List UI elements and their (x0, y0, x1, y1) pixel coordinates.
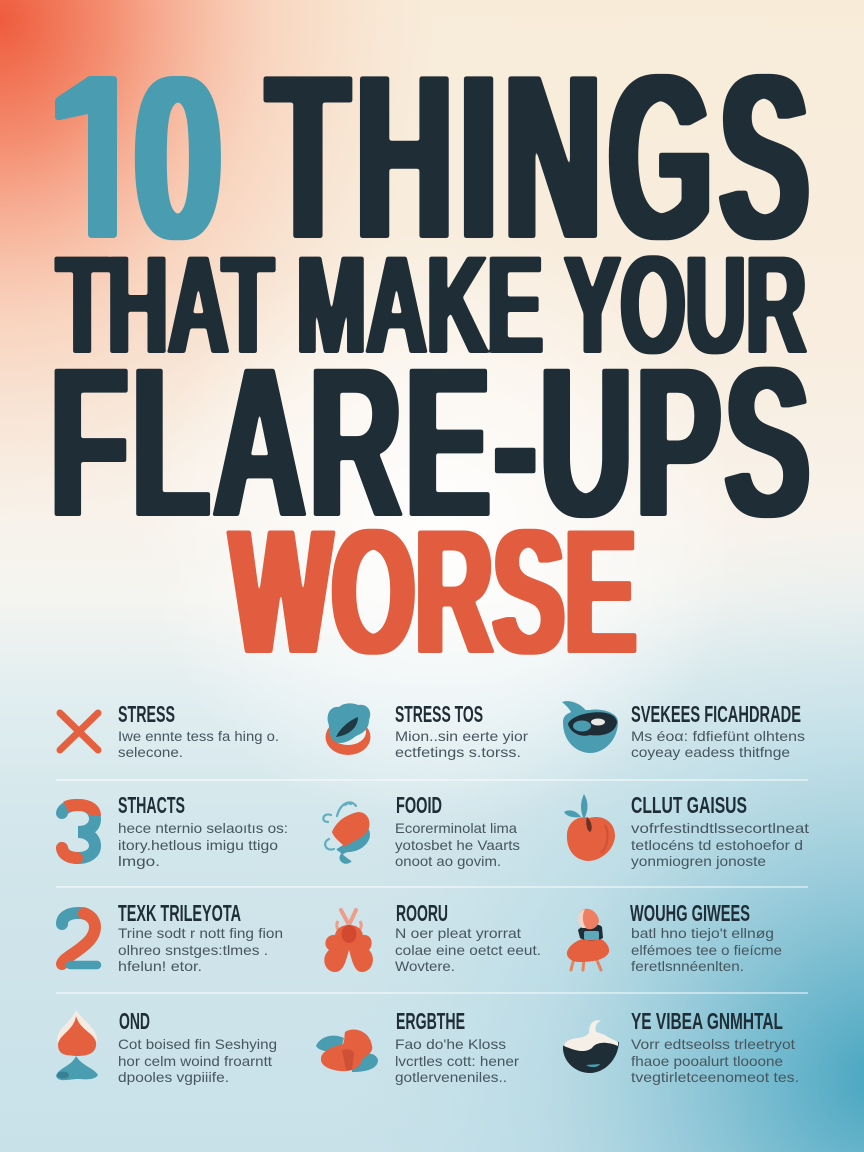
dividers (56, 780, 808, 993)
icon: coral lungs (324, 910, 373, 972)
body text: ectfetings s.torss. (395, 744, 521, 760)
body text (631, 820, 809, 869)
body text: gotlerveneniles.. (395, 1069, 507, 1085)
heading: ye vibea gnmhtal: YE VIBEA GNMHTAL (631, 1008, 783, 1034)
body text: Ms éoα: fdfiefünt olhtens (631, 728, 805, 744)
heading: stress tos: STRESS TOS (395, 701, 483, 727)
body text: feretlsnnéenlten. (631, 958, 744, 974)
title (54, 74, 810, 655)
body text (631, 1036, 799, 1085)
body text: lmgo. (118, 853, 160, 869)
title line: FLARE-UPS: FLARE-UPS (50, 323, 810, 562)
body text: colae eine oetct eeut. (395, 942, 541, 958)
body text (395, 925, 541, 974)
heading: wouhg giwees: WOUHG GIWEES (630, 900, 750, 926)
heading: ond: OND (119, 1008, 150, 1034)
item: text trileyota (62, 900, 283, 974)
body text: yotosbet he Vaarts (395, 837, 520, 853)
body text: Wovtere. (395, 958, 455, 974)
body text (631, 728, 805, 760)
body text (631, 925, 782, 974)
heading: text trileyota: TEXK TRILEYOTA (118, 900, 241, 926)
item: sthacts (62, 792, 288, 869)
body text: Cot boised fin Seshying (118, 1036, 277, 1052)
heading: rooru: ROORU (396, 900, 448, 926)
body text: N oer pleat yrorrat (395, 925, 521, 941)
body text: Mion..sin eerte yior (395, 728, 528, 744)
body text (395, 820, 520, 869)
body text: fhaoe pooalurt tlooone (631, 1053, 783, 1069)
icon: teal bowl (562, 701, 618, 753)
body text (395, 728, 528, 760)
icon: dark bowl with steam (563, 1021, 619, 1073)
icon: numeral 2 (62, 913, 97, 965)
body text (395, 1036, 519, 1085)
body text: hor celm woind froarntt (118, 1053, 272, 1069)
icon: flame drop (56, 1010, 98, 1080)
body text: Fao do'he Kloss (395, 1036, 506, 1052)
item: svekees ficahdrade (562, 701, 805, 760)
item: ergbthe (316, 1008, 519, 1085)
icon: numeral 3 (62, 805, 95, 858)
heading: fooid: FOOID (396, 792, 442, 818)
body text: dpooles vgpiiife. (118, 1069, 229, 1085)
title line: THAT MAKE YOUR: THAT MAKE YOUR (56, 227, 806, 383)
item: ond (56, 1008, 277, 1085)
body text: vofrfestindtlssecortlneat (631, 820, 809, 836)
icon: red X (60, 713, 98, 750)
heading: cllut gaisus: CLLUT GAISUS (631, 792, 747, 818)
item: wouhg giwees (567, 900, 782, 974)
body text: Vorr edtseolss trleetryot (631, 1036, 795, 1052)
body text: batl hno tiejo't ellnøg (631, 925, 774, 941)
icon: seated figure (567, 909, 609, 970)
body text: tvegtirletceenomeot tes. (631, 1069, 799, 1085)
heading: stress: STRESS (118, 701, 175, 727)
icon: apple (564, 794, 615, 861)
body text: onoot ao govim. (395, 853, 501, 869)
heading: sthacts: STHACTS (118, 792, 185, 818)
title line: WORSE: WORSE (230, 493, 636, 692)
item: stress tos (326, 701, 528, 760)
body text: Trine sodt r nott fing fion (118, 925, 283, 941)
title number: 10: 1 (53, 25, 143, 288)
body text: tetlocéns td estohoefor d (631, 837, 803, 853)
body text (118, 728, 279, 760)
body text: selecone. (118, 744, 183, 760)
body text: hece nternio selaoıtıs os: (118, 820, 288, 836)
body text: olhreo snstges:tlmes . (118, 942, 268, 958)
body text (118, 820, 288, 869)
title number: 10 (55, 76, 221, 240)
body text: Ecorerminolat lima (395, 820, 517, 836)
icon: swirl and coral shape (323, 802, 370, 863)
title number: 10: 0 (134, 30, 223, 288)
body text: hfelun! etor. (118, 958, 202, 974)
item: cllut gaisus (564, 792, 809, 869)
body text: Iwe ennte tess fa hing o. (118, 728, 279, 744)
item: fooid (323, 792, 520, 869)
body text (118, 1036, 277, 1085)
icon: bowl with leaf (326, 703, 370, 755)
body text: coyeay eadess thitfnge (631, 744, 790, 760)
body text: elfémoes tee o fieícme (631, 942, 782, 958)
body text: yonmiogren jonoste (631, 853, 766, 869)
item: rooru (324, 900, 541, 974)
body text (118, 925, 283, 974)
item: stress (60, 701, 279, 760)
item: ye vibea gnmhtal (563, 1008, 799, 1085)
body text: lvcrtles cott: hener (395, 1053, 519, 1069)
heading: ergbthe: ERGBTHE (396, 1008, 465, 1034)
title line: THINGS: THINGS (267, 25, 809, 288)
icon: coral and teal blob (316, 1030, 378, 1072)
body text: itory.hetlous imigu ttigo (118, 837, 278, 853)
